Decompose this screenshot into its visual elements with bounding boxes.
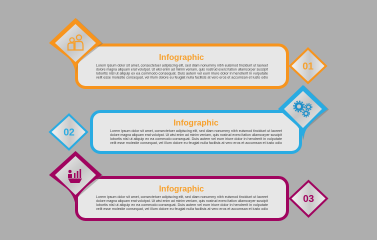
panel 3 body text: Lorem ipsum dolor sit amet, consectetuer adipiscing elit, sed diam nonummy nibh euismod tincidunt ut laoreet xyxy=(96,195,269,199)
panel 2 frame xyxy=(92,112,300,152)
panel 2 body text: dolore magna aliquam erat volutpat. Ut wisi enim ad minim veniam, quis nostrud exerci tation ullamcorper suscipit xyxy=(110,133,283,137)
number diamond 01: 01 xyxy=(302,62,314,72)
panel 2 body text: velit esse molestie consequat, vel illum dolore eu feugiat nulla facilisis at vero eros et accumsan et iusto odio xyxy=(110,141,282,145)
panel 1 body text: velit esse molestie consequat, vel illum dolore eu feugiat nulla facilisis at vero eros et accumsan et iusto odio xyxy=(96,76,268,80)
panel 1 body text xyxy=(96,64,269,80)
panel 2 body text: lobortis nisl ut aliquip ex ea commodo consequat. Duis autem vel eum iriure dolor in hendrerit in vulputate xyxy=(110,137,282,141)
panel 1 body text: Lorem ipsum dolor sit amet, consectetuer adipiscing elit, sed diam nonummy nibh euismod tincidunt ut laoreet xyxy=(96,64,269,68)
panel 2 body text: Lorem ipsum dolor sit amet, consectetuer adipiscing elit, sed diam nonummy nibh euismod tincidunt ut laoreet xyxy=(110,129,283,133)
panel: step 2 xyxy=(50,85,329,152)
icon: chart and people xyxy=(68,169,82,183)
panel 1 body text: dolore magna aliquam erat volutpat. Ut wisi enim ad minim veniam, quis nostrud exerci tation ullamcorper suscipit xyxy=(96,68,269,72)
panel 3 body text xyxy=(96,195,269,211)
panel 2 heading: Infographic xyxy=(174,118,219,128)
icon: people xyxy=(68,35,83,50)
number diamond 02: 02 xyxy=(63,128,75,138)
panel 1 body text: lobortis nisl ut aliquip ex ea commodo consequat. Duis autem vel eum iriure dolor in hendrerit in vulputate xyxy=(96,72,268,76)
number diamond 03 xyxy=(290,181,327,216)
panel 2 body text xyxy=(110,129,283,145)
number diamond 03: 03 xyxy=(303,194,314,205)
panel 3 body text: velit esse molestie consequat, vel illum dolore eu feugiat nulla facilisis at vero eros et accumsan et iusto odio xyxy=(96,207,268,211)
panel 3 body text: dolore magna aliquam erat volutpat. Ut wisi enim ad minim veniam, quis nostrud exerci tation ullamcorper suscipit xyxy=(96,199,269,203)
panel 1 icon diamond xyxy=(49,18,103,74)
panel: step 3 xyxy=(49,151,327,220)
panel 3 heading: Infographic xyxy=(159,184,204,194)
panel: step 1 xyxy=(49,18,326,88)
panel 3 frame xyxy=(76,178,288,220)
panel 1 heading: Infographic xyxy=(159,52,204,62)
panel 3 body text: lobortis nisl ut aliquip ex ea commodo consequat. Duis autem vel eum iriure dolor in hendrerit in vulputate xyxy=(96,203,268,207)
number diamond 01 xyxy=(290,48,326,83)
number diamond 02 xyxy=(50,114,87,150)
icon: gears xyxy=(294,101,312,117)
panel 2 icon diamond xyxy=(278,85,329,141)
panel 3 icon diamond xyxy=(49,151,103,206)
panel 1 frame xyxy=(76,45,288,88)
